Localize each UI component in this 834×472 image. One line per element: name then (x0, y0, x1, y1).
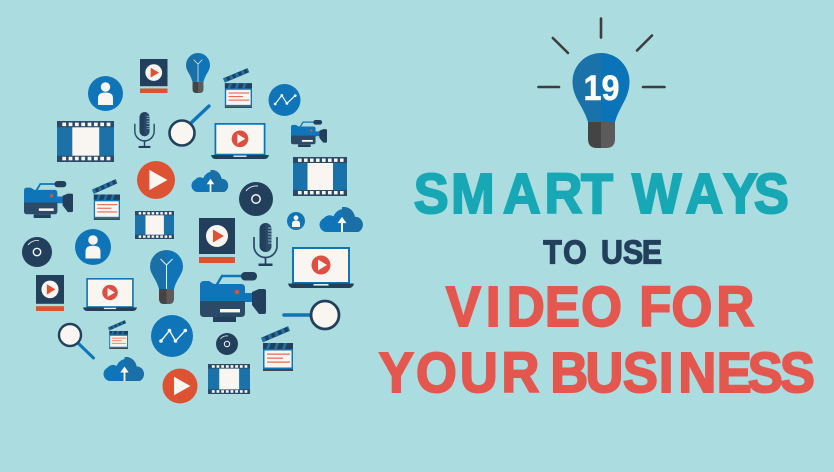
bulb glass (572, 53, 630, 122)
icon: upload cloud, bottom (104, 357, 144, 381)
icon: film strip, center (135, 211, 174, 239)
icon: clapperboard, top (224, 70, 252, 108)
icon: video camera, left (24, 181, 73, 218)
icon: magnifier, right (284, 301, 339, 329)
icon: magnifier, top (170, 106, 209, 146)
icon cluster (22, 53, 363, 404)
light rays (538, 18, 664, 87)
icon: disc, center (239, 182, 273, 216)
icon: laptop, top (211, 123, 269, 159)
heading: video for: VIDEO FOR (446, 274, 754, 338)
heading: to use: TO USE (543, 233, 662, 271)
icon: play button, bottom (162, 368, 198, 404)
icon: clapperboard, left (93, 181, 120, 220)
icon: film strip, left (57, 121, 114, 162)
icon: video book, top (140, 59, 168, 93)
icon: chart circle, lower (151, 315, 193, 357)
heading: smart ways: SMART WAYS (414, 161, 789, 225)
icon: light bulb with number 19 (538, 18, 664, 148)
icon: upload cloud, center (191, 170, 228, 192)
icon: chart circle, top (268, 84, 300, 116)
icon: person, small (287, 212, 305, 230)
icon: disc, left (22, 237, 52, 267)
icon: video book, center (199, 218, 235, 263)
icon: clapperboard, lower left (109, 322, 128, 349)
icon: video book, left (36, 275, 64, 311)
icon: light bulb, top (186, 53, 210, 93)
icon: video camera, large (200, 272, 266, 322)
icon: laptop, lower left (83, 278, 137, 311)
icon: upload cloud, right (320, 207, 363, 232)
icon: film strip, right (293, 157, 347, 196)
icon: film strip, bottom (208, 364, 250, 394)
icon: microphone, center (254, 223, 277, 266)
icon: disc, lower (216, 333, 238, 355)
icon: light bulb, lower (150, 250, 183, 304)
icon: clapperboard, lower right (262, 328, 293, 371)
icon: person, left (75, 229, 111, 265)
icon: person, top (88, 76, 123, 111)
icon: magnifier, lower left (59, 324, 94, 358)
icon: video camera, top right (291, 120, 327, 147)
icon: microphone, top (135, 112, 154, 148)
icon: laptop, right (288, 247, 354, 288)
icon: play button, upper (137, 161, 175, 199)
heading: your business: YOUR BUSINESS (379, 340, 815, 404)
bulb base (588, 122, 615, 148)
number 19: 19 (584, 69, 620, 108)
